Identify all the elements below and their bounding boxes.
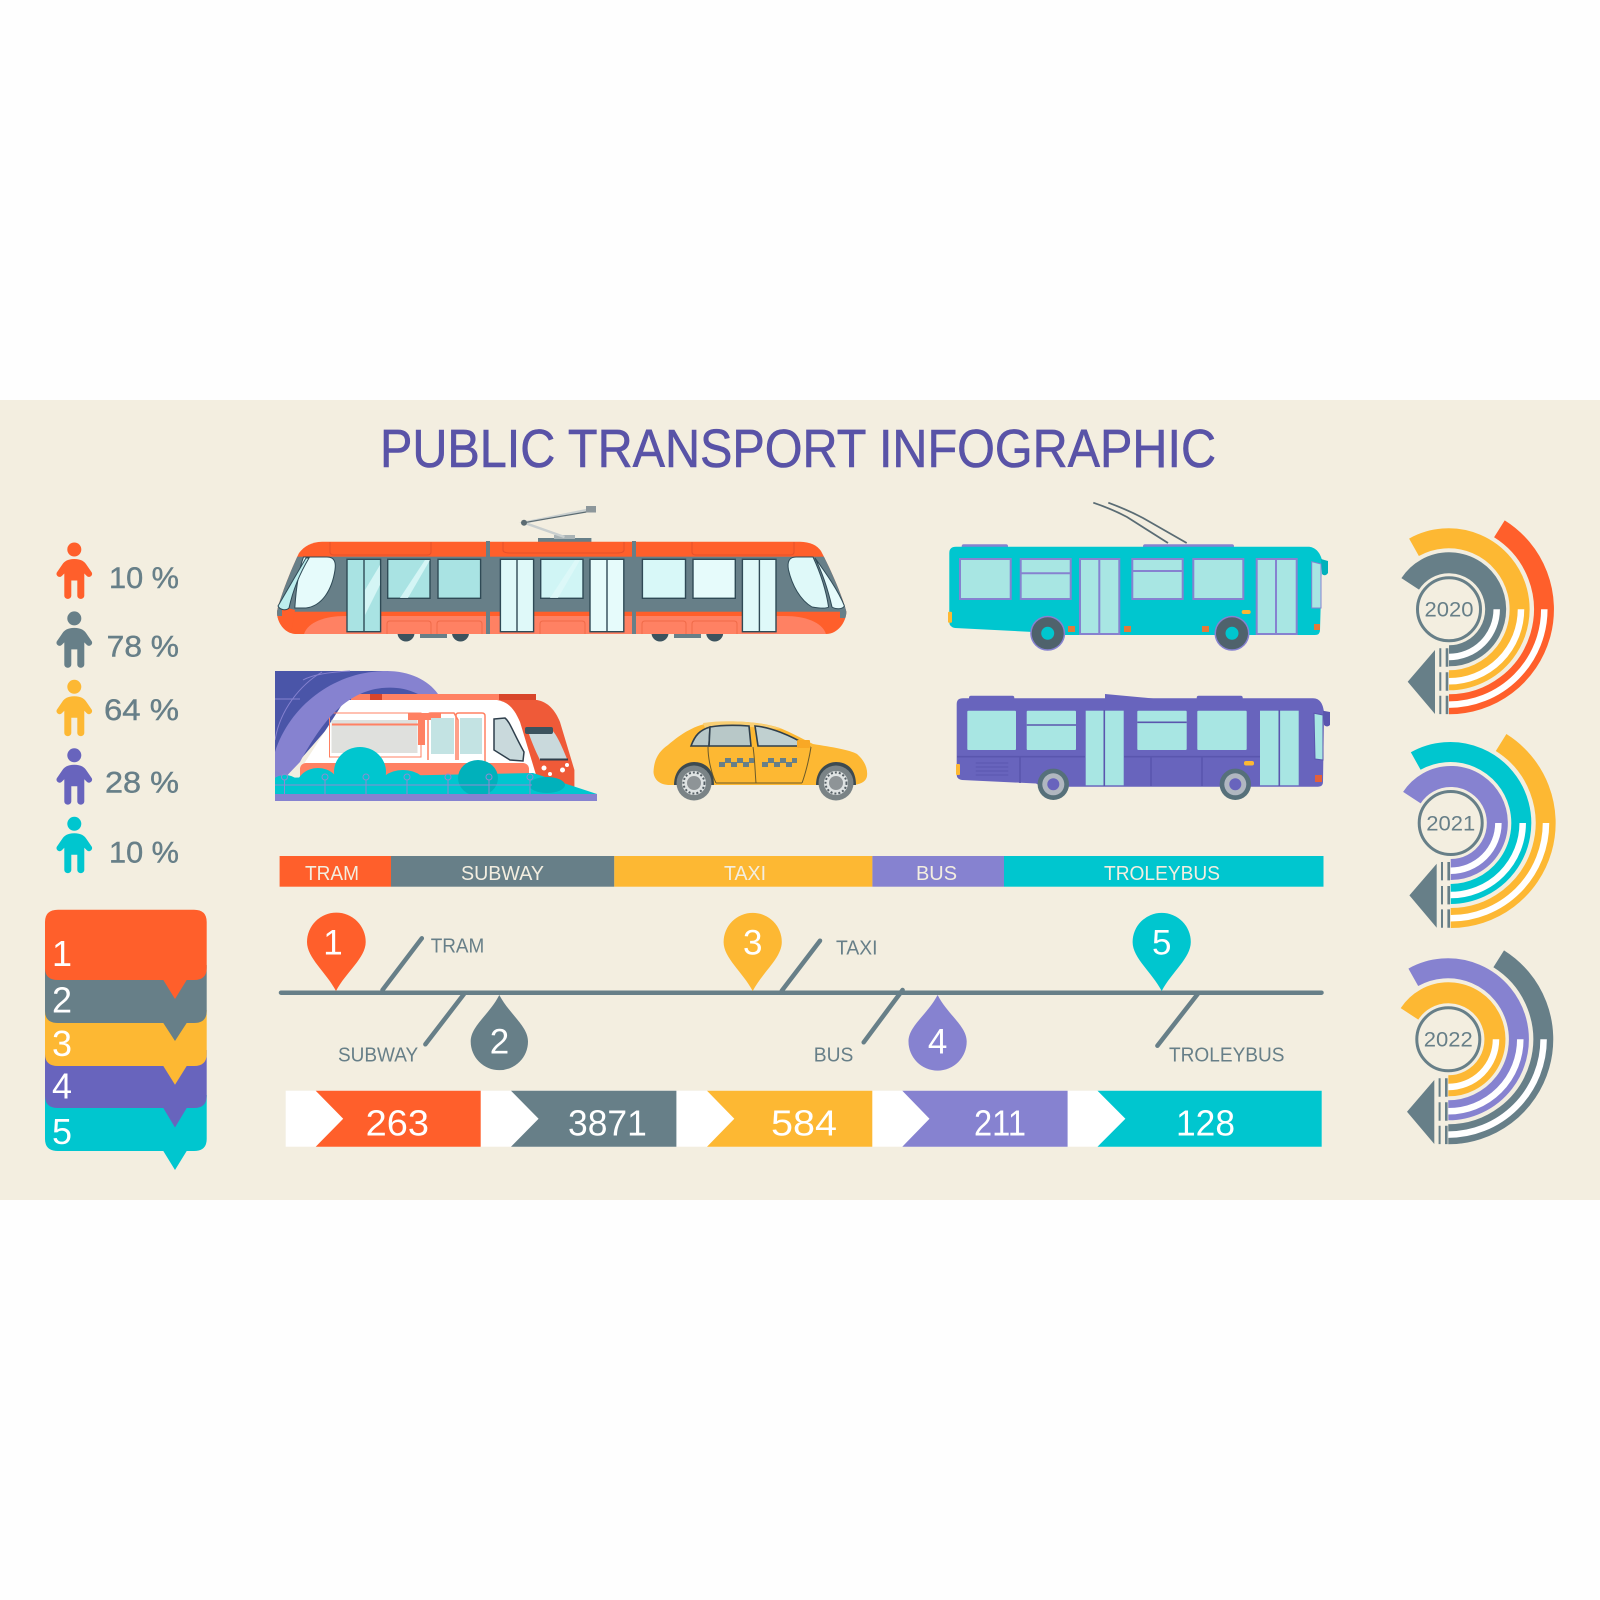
bubble 4 — [45, 1050, 207, 1128]
bus illustration — [956, 694, 1330, 800]
label 64%: 64 % — [104, 694, 179, 727]
bus window dividers — [957, 710, 1279, 786]
tram body — [270, 541, 855, 636]
pin 5 — [1133, 913, 1191, 991]
rings 2022 — [1410, 959, 1544, 1135]
trolleybus roof bumps — [962, 544, 1234, 549]
chevron number bar — [286, 1091, 1322, 1147]
year badge 2020: 2020 — [1424, 599, 1474, 622]
bubble 2 — [45, 965, 207, 1041]
legend labels: BUS — [916, 863, 957, 885]
bus windshield and mirror — [1314, 711, 1330, 760]
platform strip — [275, 794, 597, 801]
radial chart 2020 — [1408, 529, 1544, 714]
label 10% second: 10 % — [109, 836, 179, 870]
panel: beige infographic band — [0, 400, 1600, 1200]
chevron white base — [286, 1091, 1322, 1147]
tunnel dark blue — [275, 671, 418, 775]
bus roof bumps — [969, 694, 1243, 701]
tram windscreens — [278, 557, 844, 610]
legend segments — [280, 856, 1324, 887]
tunnel grid lines — [275, 671, 350, 740]
pin 3: 3 — [743, 924, 762, 962]
pin 3 — [724, 913, 782, 991]
tram pantograph — [521, 506, 596, 542]
bus windows — [967, 711, 1299, 785]
drop 4 — [908, 995, 967, 1071]
trolleybus body — [949, 547, 1322, 635]
label BUS: BUS — [814, 1044, 853, 1066]
bus wheels — [1038, 769, 1251, 800]
year badge 2021 — [1419, 792, 1482, 854]
trolleybus windshield and mirror — [1312, 559, 1328, 608]
label TAXI: TAXI — [836, 937, 878, 959]
tunnel arch — [275, 671, 438, 788]
person 64% yellow — [56, 680, 92, 736]
stacked numbered speech bubbles — [45, 910, 207, 1170]
chevron 584: 584 — [771, 1103, 837, 1144]
person 78% gray — [56, 611, 92, 668]
bubble numbers: 5 — [52, 1111, 72, 1152]
legend labels: SUBWAY — [461, 863, 544, 885]
year badge 2021: 2021 — [1426, 812, 1475, 835]
bubble numbers: 2 — [52, 980, 72, 1020]
chevron 263: 263 — [366, 1103, 429, 1144]
pin 5: 5 — [1152, 924, 1171, 962]
chevron 128: 128 — [1176, 1103, 1235, 1144]
chevron 211: 211 — [974, 1103, 1026, 1144]
trolleybus lights — [948, 610, 1320, 632]
people percentages — [56, 542, 179, 873]
year badge 2022: 2022 — [1424, 1029, 1473, 1052]
label 10%: 10 % — [109, 562, 179, 595]
tram lower panels — [387, 621, 737, 634]
subway illustration — [268, 671, 597, 812]
taxi checker — [719, 758, 797, 767]
taxi mirror — [797, 740, 810, 748]
chevron 3871: 3871 — [568, 1103, 647, 1144]
legend labels: TAXI — [724, 863, 766, 885]
chevron 584 — [707, 1091, 872, 1147]
drop 2 — [471, 995, 528, 1070]
pin 1 — [307, 913, 366, 991]
chevron 263 — [316, 1091, 481, 1147]
legend labels: TROLEYBUS — [1104, 863, 1220, 885]
person 10% orange — [56, 542, 92, 599]
rings 2021 — [1412, 742, 1546, 918]
trolleybus windows — [960, 559, 1297, 634]
tram window highlights — [365, 560, 580, 615]
timeline — [281, 913, 1322, 1071]
bushes — [275, 747, 597, 794]
bus body — [957, 698, 1324, 787]
subway train — [300, 694, 574, 790]
bubble 3 — [45, 1010, 207, 1085]
bubble numbers: 4 — [52, 1066, 72, 1106]
tram roof panels — [330, 542, 794, 555]
arrow and track 2021 — [1409, 862, 1450, 928]
trolleybus wheels — [1030, 616, 1250, 651]
taxi illustration — [654, 721, 867, 800]
bubble numbers — [52, 933, 72, 1152]
radial chart 2021 — [1409, 742, 1546, 928]
chevron 128 — [1098, 1091, 1322, 1147]
label TROLEYBUS: TROLEYBUS — [1169, 1045, 1284, 1067]
pin 1: 1 — [323, 924, 343, 962]
tram joints — [486, 541, 636, 634]
taxi door lines — [708, 747, 811, 783]
drop 2: 2 — [490, 1022, 509, 1062]
year badge 2022 — [1417, 1008, 1480, 1071]
arrow and track 2022 — [1407, 1078, 1448, 1144]
taxi roof highlight — [703, 721, 782, 729]
tram windows — [347, 559, 776, 632]
subway windows — [330, 713, 568, 762]
bubble numbers: 1 — [52, 933, 72, 974]
timeline axis and ticks — [281, 938, 1322, 1046]
label SUBWAY: SUBWAY — [338, 1045, 418, 1067]
chevron 3871 — [511, 1091, 676, 1147]
bus lights — [956, 761, 1322, 782]
chevron 211 — [902, 1091, 1068, 1147]
label 28%: 28 % — [105, 766, 179, 800]
year badge 2020 — [1418, 578, 1480, 641]
fence — [275, 774, 533, 795]
label 78%: 78 % — [107, 631, 179, 664]
arrow and track 2020 — [1408, 648, 1448, 714]
taxi front wheel — [816, 762, 856, 800]
taxi rear wheel — [674, 762, 714, 800]
tram wheels — [398, 624, 723, 642]
subway lower stripe — [300, 763, 529, 776]
trolley poles — [1093, 503, 1187, 543]
taxi windows — [691, 725, 808, 746]
bubble 5 — [45, 1095, 207, 1170]
drop 4: 4 — [928, 1022, 947, 1062]
bubble 1 — [45, 910, 207, 999]
subway headlights — [542, 763, 569, 776]
label TRAM: TRAM — [431, 935, 484, 957]
taxi body — [654, 721, 867, 785]
person 28% purple — [56, 748, 92, 805]
bubble numbers: 3 — [52, 1023, 72, 1064]
trolleybus illustration — [948, 503, 1328, 651]
tram illustration — [270, 506, 855, 642]
radial chart 2022 — [1407, 959, 1544, 1144]
person 10% teal — [56, 817, 92, 873]
rings 2020 — [1410, 529, 1544, 705]
legend labels: TRAM — [305, 863, 359, 885]
dark bush — [458, 760, 565, 796]
legend labels — [305, 863, 1220, 885]
title: PUBLIC TRANSPORT INFOGRAPHIC — [380, 419, 1216, 479]
legend bar — [280, 856, 1324, 887]
